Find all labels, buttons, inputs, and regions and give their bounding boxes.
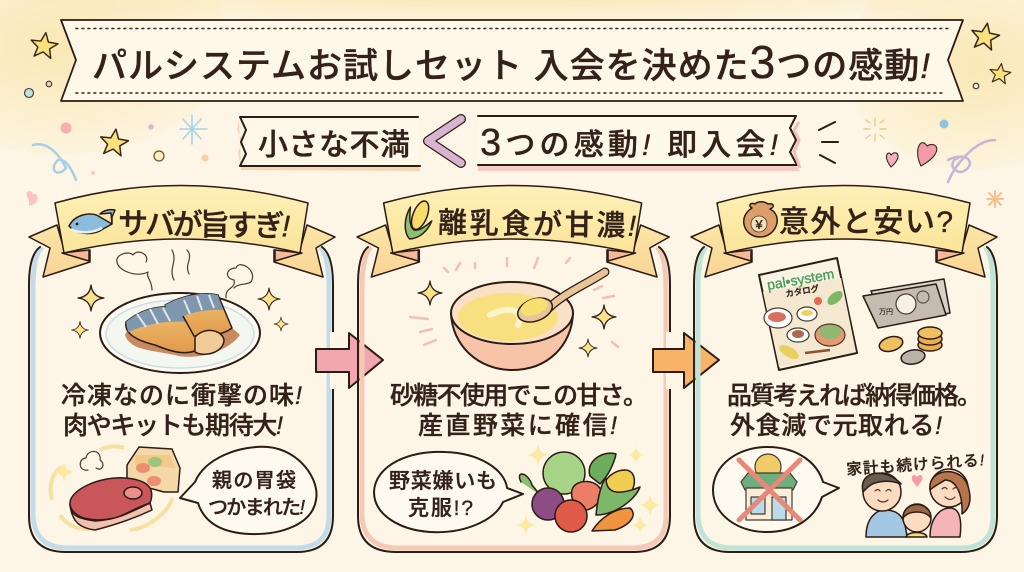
title ribbon bbox=[61, 20, 963, 101]
icon: fish bbox=[69, 210, 115, 234]
heading: 離乳食が甘濃! bbox=[438, 206, 636, 243]
icon: emphasis lines bbox=[819, 122, 838, 163]
subtitle: three impressions: 3つの感動! 即入会! bbox=[480, 122, 779, 164]
icon: money bag: ¥ bbox=[754, 217, 763, 232]
text block: 品質考えれば納得価格。 bbox=[727, 382, 982, 410]
text block: 外食減で元取れる! bbox=[730, 412, 942, 440]
icon: catalog bbox=[759, 258, 857, 370]
caption: household: 家計も続けられる! bbox=[846, 451, 985, 479]
icon: catalog: カタログ bbox=[785, 283, 820, 299]
callout bbox=[180, 447, 317, 534]
title text: パルシステムお試しセット 入会を決めた3つの感動! bbox=[92, 36, 930, 88]
decoration: stars and confetti left bbox=[24, 31, 208, 206]
banner bbox=[29, 186, 335, 277]
decoration: stars and hearts right bbox=[864, 21, 1012, 207]
icon: family bbox=[862, 469, 970, 537]
icon: vegetables bbox=[516, 444, 661, 535]
callout: no eating out bbox=[713, 447, 839, 532]
icon: meat and kit bbox=[51, 446, 180, 530]
icon: steam bbox=[117, 250, 253, 298]
text block: 砂糖不使用でこの甘さ。 bbox=[390, 382, 648, 410]
icon: bank notes bbox=[863, 279, 950, 328]
text block bbox=[727, 382, 982, 440]
text block: 冷凍なのに衝撃の味! bbox=[61, 382, 302, 410]
heading: サバが旨すぎ! bbox=[118, 208, 291, 244]
callout: 克服!? bbox=[408, 497, 473, 520]
icon: money bag bbox=[744, 202, 777, 237]
panel: value for money bbox=[691, 186, 997, 552]
text block: 産直野菜に確信! bbox=[418, 412, 617, 440]
banner bbox=[691, 186, 997, 277]
text block: 肉やキットも期待大! bbox=[63, 412, 283, 440]
heading: 意外と安い? bbox=[779, 206, 953, 239]
icon: bank notes: 万円 bbox=[879, 308, 893, 316]
arrow: orange bbox=[653, 332, 719, 389]
icon: sparkles bbox=[72, 285, 288, 338]
callout: 野菜嫌いも bbox=[389, 470, 497, 493]
icon: bowl with spoon bbox=[451, 272, 605, 370]
text block bbox=[390, 382, 648, 440]
callout: 親の胃袋 bbox=[212, 469, 296, 492]
icon: sparkles bbox=[410, 258, 618, 357]
panel: mackerel bbox=[29, 186, 335, 552]
text block bbox=[61, 382, 302, 440]
icon: corn bbox=[399, 197, 438, 244]
subtitle: small complaints bbox=[237, 117, 420, 171]
callout bbox=[374, 452, 523, 532]
icon: less-than sign bbox=[428, 119, 461, 163]
callout: つかまれた! bbox=[208, 497, 305, 519]
arrow: pink bbox=[316, 332, 383, 389]
subtitle: small complaints: 小さな不満 bbox=[258, 129, 410, 162]
icon: catalog: pal•system bbox=[766, 265, 835, 293]
banner bbox=[357, 186, 669, 277]
icon: coins bbox=[878, 327, 942, 366]
icon: mackerel dish bbox=[100, 293, 260, 373]
panel: baby food bbox=[357, 186, 670, 552]
